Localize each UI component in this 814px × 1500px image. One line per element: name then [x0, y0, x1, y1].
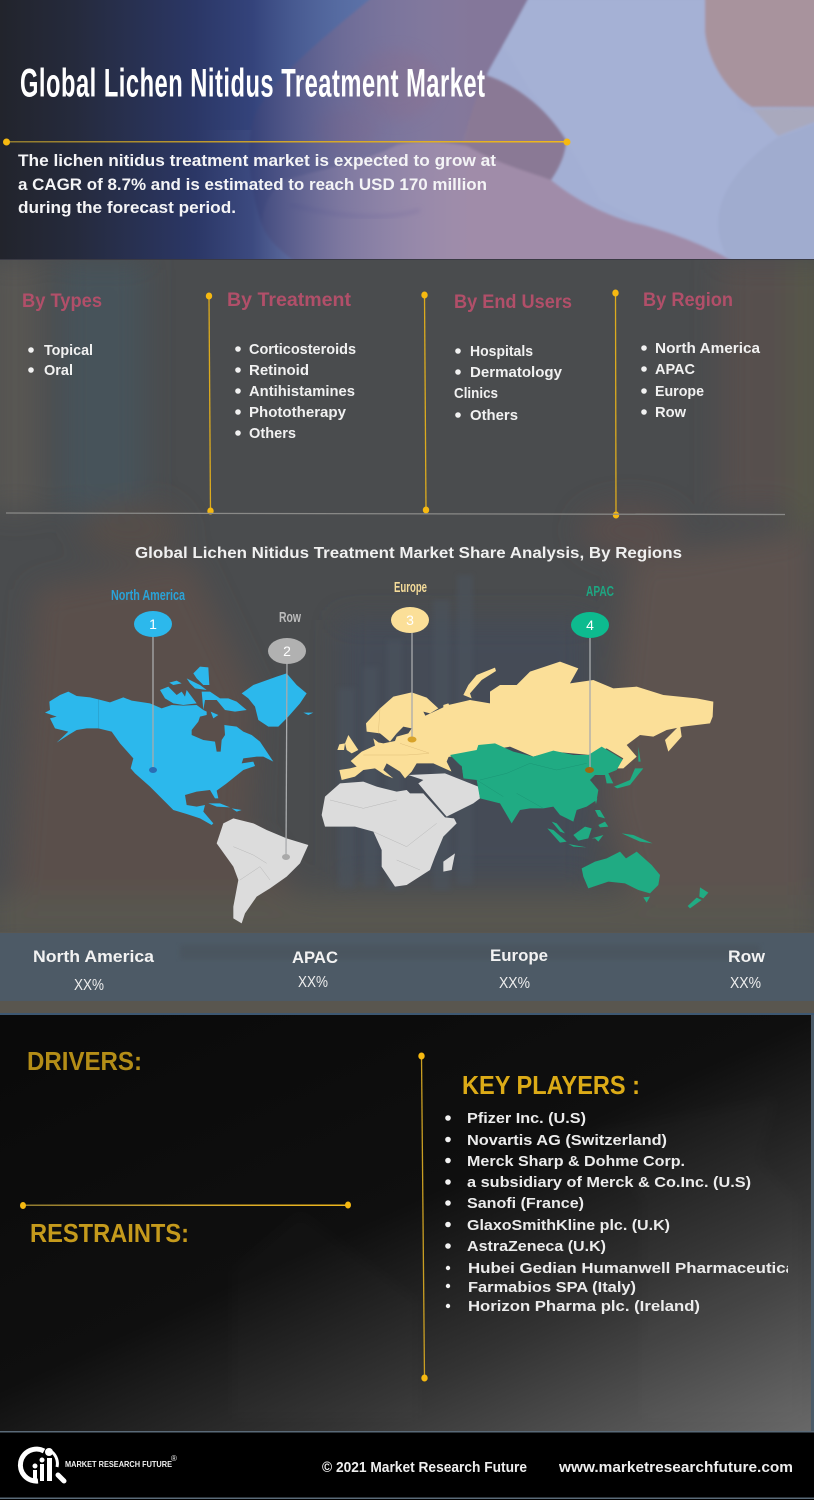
share: europe: XX% [499, 975, 530, 992]
list: types [28, 343, 93, 379]
divider: types and treatment [206, 292, 214, 514]
list: key players: Novartis AG (Switzerland) [467, 1133, 667, 1149]
list: key players: a subsidiary of Merck & Co.Inc. (U.S) [467, 1175, 751, 1191]
world map [45, 579, 713, 923]
list: types: Topical [44, 343, 93, 359]
list: key players: Farmabios SPA (Italy) [468, 1280, 636, 1296]
list: types: Oral [44, 363, 73, 379]
list: treatments: Antihistamines [249, 384, 355, 400]
region: pacific islands and oceania [547, 747, 708, 908]
list: key players [445, 1111, 796, 1315]
marker 1: north america [134, 611, 172, 773]
heading: by region: By Region [643, 289, 733, 311]
heading: key players: KEY PLAYERS : [462, 1072, 640, 1100]
list: regions: Row [655, 405, 686, 421]
region: russia [423, 662, 713, 768]
marker 4: apac [571, 612, 609, 773]
list: key players: GlaxoSmithKline plc. (U.K) [467, 1218, 670, 1234]
panel: segmentation and map background [0, 260, 814, 945]
list: key players: AstraZeneca (U.K) [467, 1239, 606, 1255]
list: key players: Pfizer Inc. (U.S) [467, 1111, 586, 1127]
heading: by types: By Types [22, 290, 102, 312]
intro text: The lichen nitidus treatment market is expected to grow at [18, 151, 496, 170]
label: north america: North America [111, 587, 185, 604]
list: key players: Sanofi (France) [467, 1196, 584, 1212]
panel: header photo banner [0, 0, 814, 265]
list: key players: Horizon Pharma plc. (Ireland) [468, 1299, 700, 1315]
region: asia mainland [449, 743, 623, 823]
list: regions: APAC [655, 362, 695, 378]
marker 3: europe [391, 607, 429, 742]
list: key players: Merck Sharp & Dohme Corp. [467, 1154, 685, 1170]
chart title: Global Lichen Nitidus Treatment Market Share Analysis, By Regions [135, 545, 682, 562]
logo wordmark: MARKET RESEARCH FUTURE [65, 1460, 173, 1469]
list: key players: Hubei Gedian Humanwell Pharmaceutica [468, 1261, 796, 1277]
list: treatments: Phototherapy [249, 405, 347, 421]
label: apac: APAC [586, 583, 614, 600]
intro text: a CAGR of 8.7% and is estimated to reach USD 170 million [18, 175, 487, 194]
share: row [728, 947, 766, 992]
title: Global Lichen Nitidus Treatment Market [20, 61, 485, 105]
share: apac: XX% [298, 974, 328, 991]
panel: by region [641, 289, 761, 421]
list: regions [641, 341, 761, 421]
panel: drivers, restraints and key players [0, 1015, 814, 1431]
share: row: XX% [730, 975, 761, 992]
panel: by types [22, 290, 102, 379]
share: europe: Europe [490, 946, 548, 965]
divider: key players [418, 1052, 428, 1382]
label: row: Row [279, 609, 301, 626]
share: north america: North America [33, 947, 155, 966]
region: north america [45, 667, 313, 825]
share: apac: APAC [292, 948, 338, 967]
list: end users: Clinics [454, 386, 498, 402]
copyright: © 2021 Market Research Future [322, 1460, 527, 1476]
intro text [18, 151, 496, 217]
region: south america [217, 818, 308, 923]
registered mark: ® [171, 1454, 177, 1463]
panel: by treatment [227, 289, 356, 442]
gold divider [3, 138, 570, 146]
heading: drivers: DRIVERS: [27, 1048, 142, 1076]
panel: by end users [454, 291, 572, 424]
intro text: during the forecast period. [18, 198, 236, 217]
list: end users: Hospitals [470, 344, 533, 360]
panel: footer [0, 1431, 814, 1500]
share: north america [33, 947, 155, 994]
divider: end users and region [612, 290, 619, 518]
panel: regional share strip [0, 932, 814, 1015]
list: regions: Europe [655, 384, 704, 400]
share: apac [292, 948, 338, 991]
share: row: Row [728, 947, 766, 966]
marker 4: apac: 4 [586, 617, 594, 633]
share: north america: XX% [74, 977, 104, 994]
list: end users: Dermatology [470, 365, 563, 381]
marker 2: row: 2 [283, 643, 291, 659]
website: www.marketresearchfuture.com [558, 1460, 793, 1476]
heading: by treatment: By Treatment [227, 289, 352, 311]
list: end users: Others [470, 408, 518, 424]
marker 2: row [268, 638, 306, 860]
marker 1: north america: 1 [149, 616, 157, 632]
label: europe: Europe [394, 579, 427, 596]
divider: drivers and restraints [20, 1202, 351, 1209]
region: africa and middle east [322, 773, 480, 887]
list: treatments [235, 342, 356, 442]
share: europe [490, 946, 548, 992]
heading: restraints: RESTRAINTS: [30, 1220, 189, 1248]
heading: by end users: By End Users [454, 291, 572, 313]
divider: treatment and end users [421, 292, 429, 514]
list: treatments: Corticosteroids [249, 342, 356, 358]
list: treatments: Retinoid [249, 363, 309, 379]
icon: market research future logo [20, 1448, 64, 1481]
marker 3: europe: 3 [406, 612, 414, 628]
list: treatments: Others [249, 426, 296, 442]
list: regions: North America [655, 341, 761, 357]
list: end users [454, 344, 563, 424]
region: europe [337, 668, 530, 780]
